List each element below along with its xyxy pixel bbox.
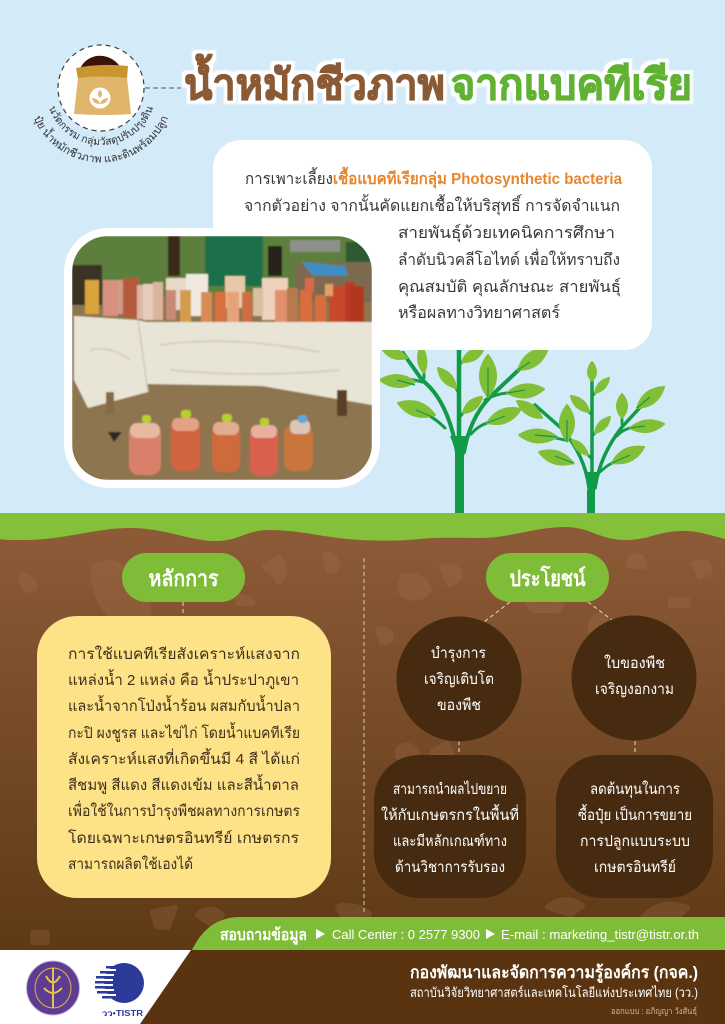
benefit: growth: เจริญเติบโต — [424, 670, 494, 688]
benefit: cost: ลดต้นทุนในการ — [590, 780, 680, 799]
photo: bottles on table — [64, 228, 380, 488]
title: น้ำหมักชีวภาพ — [184, 53, 445, 108]
contact bar: Call Center : 0 2577 9300 — [332, 927, 480, 942]
benefit: leaves: เจริญงอกงาม — [595, 681, 674, 698]
logo panel: วว•TISTR — [102, 1009, 143, 1018]
footer band — [0, 950, 725, 1024]
panel: principle text: โดยเฉพาะเกษตรอินทรีย์ เกษตรกร — [68, 829, 299, 847]
grass band — [0, 513, 725, 541]
benefit: leaves — [572, 616, 696, 740]
panel: principle text: กะปิ ผงชูรส และไข่ไก่ โดยน้ำแบคทีเรีย — [68, 722, 300, 742]
panel: principle text: สังเคราะห์แสงที่เกิดขึ้นมี 4 สี ได้แก่ — [68, 748, 300, 768]
contact bar — [192, 917, 725, 950]
panel: principle text: สีชมพู สีแดง สีแดงเข้ม และสีน้ำตาล — [68, 774, 299, 794]
heading: benefits: ประโยชน์ — [510, 565, 586, 591]
benefit: growth — [396, 616, 522, 742]
organisation — [410, 962, 698, 1017]
divider — [363, 558, 365, 915]
organisation: กองพัฒนาและจัดการความรู้องค์กร (กจค.) — [410, 962, 698, 984]
panel: principle text: การใช้แบคทีเรียสังเคราะห์แสงจาก — [68, 645, 300, 663]
heading: principle: หลักการ — [148, 566, 219, 591]
heading: benefits — [486, 553, 609, 602]
soil background — [0, 515, 725, 955]
panel: principle text: และน้ำจากโป่งน้ำร้อน ผสมกับน้ำปลา — [68, 695, 300, 715]
panel: principle text: เพื่อใช้ในการบำรุงพืชผลทางการเกษตร — [68, 800, 300, 821]
benefit: leaves: ใบของพืช — [604, 654, 665, 672]
text panel: จากตัวอย่าง จากนั้นคัดแยกเชื้อให้บริสุทธิ์ การจัดจำแนก — [244, 194, 620, 216]
text panel: หรือผลทางวิทยาศาสตร์ — [398, 303, 560, 322]
benefit: extension: และมีหลักเกณฑ์ทาง — [393, 833, 507, 850]
icon: sack badge — [58, 45, 144, 131]
connector — [145, 87, 181, 89]
benefit: extension: สามารถนำผลไปขยาย — [393, 780, 507, 798]
benefit: extension — [374, 755, 526, 898]
text panel — [213, 140, 652, 350]
organisation: ออกแบบ : อภิญญา วังสันธุ์ — [611, 1006, 697, 1017]
benefit: cost — [556, 755, 713, 898]
benefit: growth: บำรุงการ — [431, 645, 486, 663]
contact bar: E-mail : marketing_tistr@tistr.or.th — [501, 927, 699, 942]
logo panel — [0, 950, 191, 1024]
text panel: สายพันธุ์ด้วยเทคนิคการศึกษา — [398, 223, 615, 243]
benefit: extension: ให้กับเกษตรกรในพื้นที่ — [381, 804, 519, 824]
title: จากแบคทีเรีย — [451, 61, 692, 108]
badge caption: ปุ๋ย น้ำหมักชีวภาพ และดินพร้อมปลูก — [34, 116, 168, 162]
benefit: extension: ด้านวิชาการรับรอง — [395, 859, 505, 876]
panel: principle text: สามารถผลิตใช้เองได้ — [68, 855, 193, 873]
panel: principle text — [37, 616, 331, 898]
benefit: growth: ของพืช — [437, 697, 481, 714]
text panel: การเพาะเลี้ยงเชื้อแบคทีเรียกลุ่ม Photosynthetic bacteria — [245, 166, 622, 189]
benefit: cost: เกษตรอินทรีย์ — [594, 859, 676, 876]
connectors — [183, 602, 635, 755]
panel: principle text: แหล่งน้ำ 2 แหล่ง คือ น้ำประปาภูเขา — [68, 669, 299, 689]
heading: principle — [122, 553, 245, 602]
benefit: cost: ซื้อปุ๋ย เป็นการขยาย — [578, 804, 692, 825]
benefit: cost: การปลูกแบบระบบ — [580, 833, 690, 850]
text panel: ลำดับนิวคลีโอไทด์ เพื่อให้ทราบถึง — [398, 248, 620, 269]
badge caption: นวัตกรรม กลุ่มวัสดุปรับปรุงดิน — [50, 106, 153, 148]
trees — [380, 345, 664, 513]
title — [184, 53, 692, 108]
text panel: คุณสมบัติ คุณลักษณะ สายพันธุ์ — [398, 277, 621, 297]
contact bar: สอบถามข้อมูล — [220, 926, 307, 946]
